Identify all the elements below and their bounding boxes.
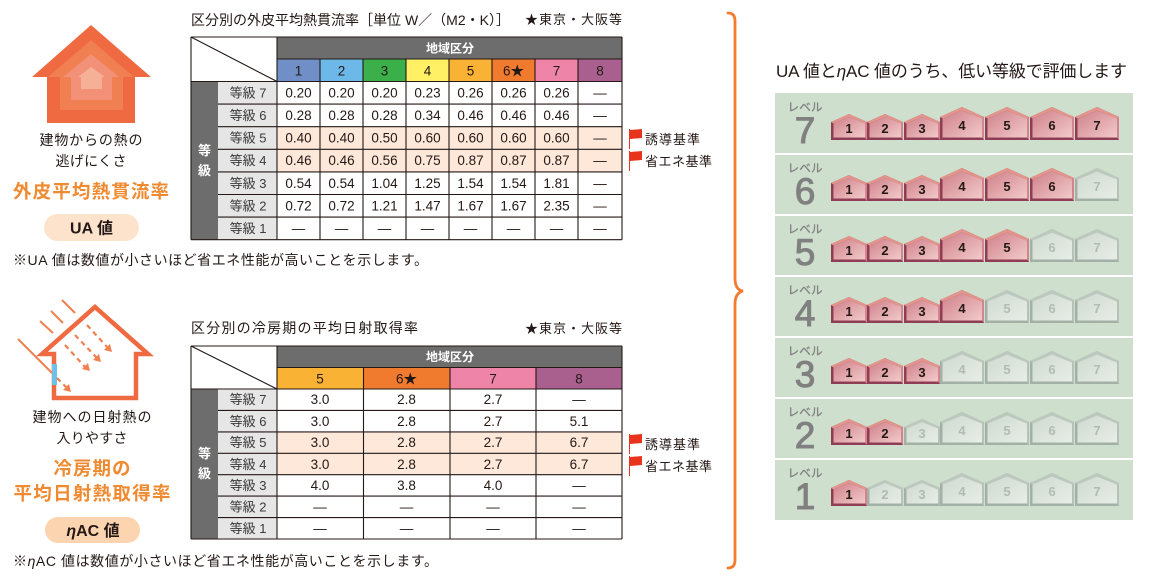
panel: level 6: 7 [1093, 179, 1101, 194]
table: eta AC values by region: 6★ [396, 372, 417, 386]
table: UA values by region: 1.67 [457, 198, 484, 214]
text: heat escape description: 逃げにくさ [56, 153, 126, 169]
table: eta AC values by region: 6.7 [570, 457, 588, 472]
table: UA values by region: 0.54 [285, 176, 312, 191]
heading: UA term: 外皮平均熱貫流率 [13, 181, 169, 202]
panel: level 4: 3 [918, 304, 926, 319]
table: UA values by region: 1.21 [371, 198, 398, 214]
table: UA values by region: 7 [553, 64, 560, 78]
table: eta AC values by region: 等級 7 [230, 392, 266, 407]
table: eta AC values by region [191, 346, 622, 539]
panel: level 5: 5 [795, 232, 815, 273]
table: UA values by region: 1 [295, 64, 302, 78]
panel: level 7: 3 [918, 121, 926, 136]
table: UA values by region: — [335, 221, 349, 236]
table: UA values by region: 0.87 [457, 153, 484, 168]
table: eta AC values by region: 4.0 [311, 478, 329, 493]
table: UA values by region: — [593, 153, 607, 168]
table: UA values by region: 0.20 [328, 86, 355, 100]
table: UA values by region: — [378, 221, 392, 236]
panel: level 7: 1 [845, 121, 853, 136]
table: eta AC values by region: 6.7 [570, 435, 588, 450]
table: UA values by region: 8 [596, 64, 604, 78]
table: eta AC values by region: 地域区分 [426, 349, 474, 364]
panel: level 6: 6 [795, 171, 815, 212]
heading: eta AC term: 冷房期の [54, 458, 130, 479]
panel: level 1: 7 [1093, 484, 1101, 499]
text: solar heat description: 入りやすさ [56, 430, 128, 446]
panel: eta AC value explanation [14, 300, 170, 543]
table: UA values by region: 地域区分 [426, 40, 474, 56]
table: UA values by region: 0.56 [371, 153, 398, 168]
panel: level 7 [775, 93, 1133, 153]
panel: level 6: レベル [788, 163, 822, 175]
table: eta AC values by region: 2.7 [484, 457, 502, 472]
table: UA values by region: 0.28 [285, 108, 312, 123]
table: UA values by region: 0.72 [328, 198, 355, 214]
table: UA values by region: 1.25 [414, 176, 441, 191]
table: eta AC values by region: 4.0 [484, 478, 502, 493]
flag: eta AC induced standard [629, 434, 700, 454]
table: UA values by region: 0.34 [414, 108, 441, 123]
panel: level 3: 4 [958, 362, 966, 377]
panel: level 3: 3 [918, 365, 926, 380]
table: UA values by region: — [593, 108, 607, 123]
table: UA values by region: — [292, 221, 306, 236]
table: eta AC values by region: 2.8 [397, 457, 416, 472]
table: UA values by region: 0.72 [285, 198, 312, 214]
table: UA values by region: 0.75 [414, 153, 441, 168]
table: UA values by region: 級 [198, 163, 211, 178]
table: UA values by region: 0.46 [285, 153, 312, 168]
table: UA values by region: 0.40 [328, 130, 355, 146]
panel: level 7: レベル [788, 102, 822, 114]
table: UA values by region: 等級 1 [230, 221, 266, 236]
panel: level 3: レベル [788, 346, 822, 358]
table: UA values by region: 0.50 [371, 130, 398, 146]
table: eta AC values by region: 7 [489, 372, 497, 386]
table: eta AC values by region: 2.7 [484, 392, 502, 407]
table: eta AC values by region: — [486, 500, 500, 514]
table: UA values by region: 2.35 [543, 198, 570, 214]
table: UA values by region: 0.26 [457, 86, 484, 100]
panel: level 4: 5 [1003, 301, 1011, 316]
table: eta AC values by region: 3.0 [311, 414, 329, 429]
table: eta AC values by region: — [486, 521, 500, 536]
panel: level 6: 4 [958, 179, 966, 194]
arrow: curly brace [728, 13, 743, 568]
panel: level 4: 7 [1093, 301, 1101, 316]
table: UA values by region: 等級 6 [230, 108, 266, 123]
panel: level 1: 1 [845, 487, 853, 502]
panel: level 7: 6 [1048, 118, 1056, 133]
panel: level 2 [775, 399, 1133, 458]
table: UA values by region: 等級 5 [230, 130, 266, 146]
flag: eta AC energy saving standard [629, 456, 712, 476]
flag: UA induced standard: 誘導基準 [645, 132, 700, 147]
text: UA table star note: ★東京・大阪等 [525, 12, 622, 27]
table: UA values by region: 1.67 [500, 198, 527, 214]
table: UA values by region: 1.54 [500, 176, 527, 191]
table: UA values by region: 0.54 [328, 176, 355, 191]
table: eta AC values by region: 5.1 [570, 414, 588, 429]
panel: level 4: 6 [1048, 301, 1056, 316]
table: UA values by region: 1.81 [543, 176, 570, 191]
table: UA values by region: — [593, 198, 607, 214]
table: eta AC values by region: 8 [575, 372, 583, 386]
table: UA values by region: 4 [424, 64, 432, 78]
panel: level 5 [775, 216, 1133, 275]
panel: level 2: 2 [881, 426, 889, 441]
table: UA values by region: 0.60 [500, 130, 527, 146]
table: eta AC values by region: 等 [198, 446, 211, 461]
panel: level 6 [775, 155, 1133, 214]
table: eta AC values by region: 3.0 [311, 435, 329, 450]
table: UA values by region: 0.46 [543, 108, 570, 123]
panel: level 2: 5 [1003, 423, 1011, 438]
table: UA values by region: 1.47 [414, 198, 441, 214]
text: heat escape description [40, 132, 142, 169]
panel: level 4: 4 [958, 301, 966, 316]
note: UA: ※UA 値は数値が小さいほど省エネ性能が高いことを示します。 [13, 252, 428, 268]
panel: level 7: 7 [1093, 118, 1101, 133]
table: UA values by region: — [421, 221, 435, 236]
table: UA values by region: — [464, 221, 478, 236]
table: UA values by region: 0.20 [371, 86, 398, 100]
table: UA values by region: 0.60 [543, 130, 570, 146]
panel: level 3: 2 [881, 365, 889, 380]
panel: level 1: 2 [881, 487, 889, 502]
panel: level 3: 1 [845, 365, 853, 380]
table: eta AC values by region: — [313, 521, 327, 536]
text: heat escape description: 建物からの熱の [40, 132, 142, 148]
panel: level 5: 2 [881, 243, 889, 258]
panel: level 2: 7 [1093, 423, 1101, 438]
table: eta AC values by region: 2.7 [484, 435, 502, 450]
table: UA values by region: 0.23 [414, 86, 441, 100]
table: UA values by region: 0.28 [328, 108, 355, 123]
icon: house heat layers [32, 25, 151, 123]
table: UA values by region: 3 [381, 64, 388, 78]
flag: UA energy saving standard [629, 151, 712, 171]
table: eta AC values by region: 等級 1 [230, 521, 266, 536]
panel: level 5: 4 [958, 240, 966, 255]
table: UA values by region: 1.04 [371, 176, 398, 191]
table: UA values by region: — [550, 221, 564, 236]
panel: level 6: 5 [1003, 179, 1011, 194]
table: eta AC values by region: — [572, 521, 586, 536]
table: eta AC values by region: 等級 4 [230, 457, 266, 472]
panel: level 1 [775, 460, 1133, 520]
table: eta AC values by region: — [400, 500, 414, 514]
table: eta AC values by region: 3.0 [311, 392, 329, 407]
table: UA values by region: 0.87 [543, 153, 570, 168]
table: UA values by region: 0.26 [543, 86, 570, 100]
flag: UA induced standard [629, 129, 700, 149]
table: UA values by region: — [593, 176, 607, 191]
table: eta AC values by region: 2.8 [397, 392, 416, 407]
table: eta AC values by region: 2.8 [397, 414, 416, 429]
panel: level 2: 1 [845, 426, 853, 441]
table: UA values by region [191, 37, 622, 240]
heading: eta AC term [14, 458, 170, 504]
table: eta AC values by region: 等級 6 [230, 414, 266, 429]
panel: level 4: 1 [845, 304, 853, 319]
panel: level 7: 2 [881, 121, 889, 136]
panel: level 4: レベル [788, 285, 822, 297]
table: UA values by region: 等級 3 [230, 176, 266, 191]
icon: house with sunlight [18, 300, 148, 398]
table: eta AC values by region: 等級 5 [230, 435, 266, 450]
panel: level 3: 5 [1003, 362, 1011, 377]
panel: level 3 [775, 338, 1133, 397]
table: UA values by region: 0.46 [457, 108, 484, 123]
table: UA values by region: — [593, 221, 607, 236]
table: UA values by region: 0.20 [285, 86, 312, 100]
table: UA values by region: 2 [338, 64, 345, 78]
panel: level 1: 1 [795, 476, 815, 517]
panel: level 5: 3 [918, 243, 926, 258]
panel: level 2: 4 [958, 423, 966, 438]
panel: level 1: 4 [958, 484, 966, 499]
badge: eta AC value: ηAC 値 [66, 521, 120, 540]
table: eta AC values by region: 等級 2 [230, 500, 266, 514]
table: eta AC values by region: 2.8 [397, 435, 416, 450]
table: UA values by region: — [593, 86, 607, 100]
table: UA values by region: 等級 4 [230, 153, 266, 168]
heading: evaluation rule: UA 値とηAC 値のうち、低い等級で評価します [776, 62, 1127, 81]
panel: level 7: 4 [958, 118, 966, 133]
note: eta AC: ※ηAC 値は数値が小さいほど省エネ性能が高いことを示します。 [13, 553, 438, 569]
table: UA values by region: — [507, 221, 521, 236]
flag: eta AC energy saving standard: 省エネ基準 [645, 459, 712, 474]
table: UA values by region: 等級 2 [230, 198, 266, 214]
panel: UA value explanation [13, 25, 169, 241]
panel: level 6: 2 [881, 182, 889, 197]
table: UA values by region: 0.40 [285, 130, 312, 146]
table: UA values by region: 1.54 [457, 176, 484, 191]
table: eta AC values by region: 級 [198, 466, 211, 481]
text: solar heat description: 建物への日射熱の [32, 409, 152, 425]
table: UA values by region: 等級 7 [230, 86, 266, 100]
text: solar heat description [32, 409, 152, 446]
table: UA values by region: — [593, 130, 607, 146]
table: UA values by region: 6★ [503, 64, 524, 78]
panel: level 1: レベル [788, 468, 822, 480]
heading: UA table title: 区分別の外皮平均熱貫流率［単位 W／（M2・K）］ [191, 12, 510, 28]
text: eta AC table star note: ★東京・大阪等 [525, 321, 622, 336]
panel: level 4 [775, 277, 1133, 336]
heading: eta AC term: 平均日射熱取得率 [14, 483, 170, 504]
panel: level 3: 3 [795, 354, 815, 395]
panel: level 4: 4 [795, 293, 815, 334]
table: UA values by region: 0.87 [500, 153, 527, 168]
panel: level 1: 5 [1003, 484, 1011, 499]
table: eta AC values by region: — [572, 478, 586, 493]
panel: level 1: 3 [918, 487, 926, 502]
table: eta AC values by region: 3.0 [311, 457, 329, 472]
badge: UA value [44, 214, 139, 241]
panel: level 1: 6 [1048, 484, 1056, 499]
table: UA values by region: 0.60 [414, 130, 441, 146]
table: eta AC values by region: 等級 3 [230, 478, 266, 493]
panel: level 6: 1 [845, 182, 853, 197]
flag: UA energy saving standard: 省エネ基準 [645, 154, 712, 169]
table: UA values by region: 0.26 [500, 86, 527, 100]
panel: level 2: レベル [788, 407, 822, 419]
panel: level 5: 1 [845, 243, 853, 258]
badge: UA value: UA 値 [70, 218, 113, 238]
panel: level 7: 7 [795, 110, 815, 151]
table: eta AC values by region: 3.8 [397, 478, 416, 493]
panel: level 5: 7 [1093, 240, 1101, 255]
badge: eta AC value [45, 517, 140, 543]
table: eta AC values by region: — [400, 521, 414, 536]
flag: eta AC induced standard: 誘導基準 [645, 437, 700, 452]
panel: level 3: 7 [1093, 362, 1101, 377]
table: UA values by region: 0.46 [328, 153, 355, 168]
panel: level 3: 6 [1048, 362, 1056, 377]
table: UA values by region: 等 [198, 143, 211, 158]
heading: eta AC table title: 区分別の冷房期の平均日射取得率 [191, 320, 418, 336]
table: UA values by region: 0.60 [457, 130, 484, 146]
panel: level 6: 6 [1048, 179, 1056, 194]
panel: level 2: 6 [1048, 423, 1056, 438]
panel: level 5: 5 [1003, 240, 1011, 255]
table: eta AC values by region: 2.7 [484, 414, 502, 429]
panel: level 2: 3 [918, 426, 926, 441]
table: eta AC values by region: — [572, 500, 586, 514]
panel: level 6: 3 [918, 182, 926, 197]
table: UA values by region: 0.46 [500, 108, 527, 123]
panel: level 7: 5 [1003, 118, 1011, 133]
table: UA values by region: 0.28 [371, 108, 398, 123]
panel: level 5: 6 [1048, 240, 1056, 255]
table: eta AC values by region: — [313, 500, 327, 514]
panel: level 5: レベル [788, 224, 822, 236]
table: eta AC values by region: 5 [316, 372, 324, 386]
panel: level 4: 2 [881, 304, 889, 319]
panel: level 2: 2 [795, 415, 815, 456]
table: UA values by region: 5 [467, 64, 474, 78]
table: eta AC values by region: — [572, 392, 586, 407]
